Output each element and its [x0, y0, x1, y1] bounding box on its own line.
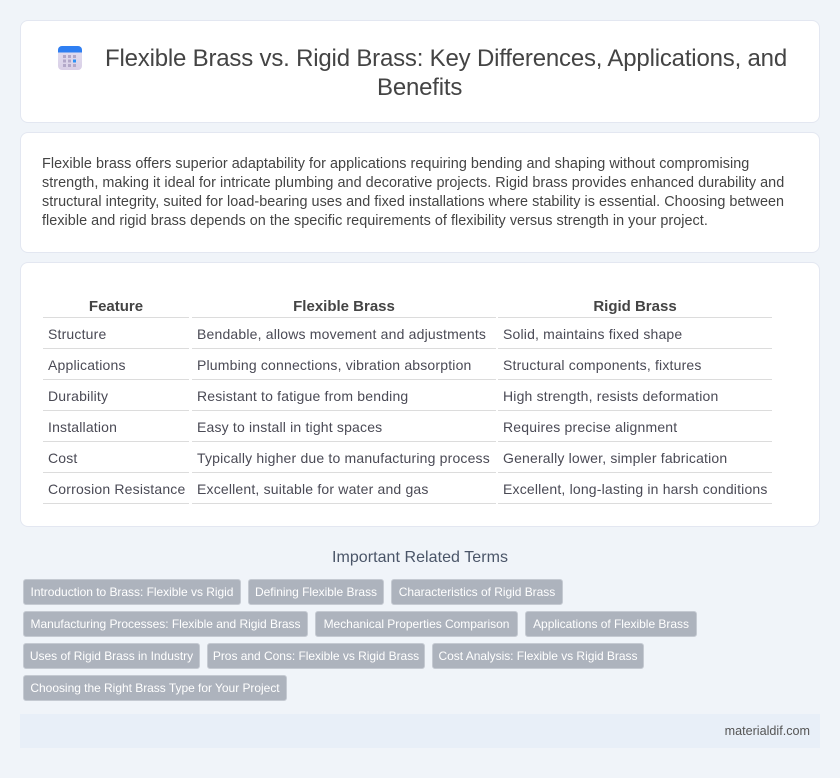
row: Structure flexible: Bendable, allows movement and adjustments: [197, 326, 486, 342]
tag: [315, 611, 518, 637]
footer bar: [20, 714, 820, 748]
row: Structure rigid: Solid, maintains fixed shape: [503, 326, 682, 342]
tag: [23, 643, 200, 669]
tag: [23, 611, 308, 637]
tag: Defining Flexible Brass: [255, 585, 377, 599]
row: Durability flexible: Resistant to fatigue from bending: [197, 388, 408, 404]
panel: intro paragraph: [20, 132, 820, 253]
table header: Rigid Brass: Rigid Brass: [593, 298, 677, 315]
row: Cost flexible: Typically higher due to manufacturing process: [197, 450, 490, 466]
panel: comparison table: [20, 262, 820, 527]
tag: Applications of Flexible Brass: [533, 617, 689, 631]
tag: [391, 579, 563, 605]
tag: Characteristics of Rigid Brass: [399, 585, 555, 599]
tag: Manufacturing Processes: Flexible and Rigid Brass: [30, 617, 300, 631]
row: Cost rigid: Generally lower, simpler fabrication: [503, 450, 727, 466]
row: Applications: Applications: [48, 357, 126, 373]
tag: Pros and Cons: Flexible vs Rigid Brass: [213, 649, 419, 663]
tag: [432, 643, 644, 669]
title line 1: Flexible Brass vs. Rigid Brass: Key Differences, Applications, and: [105, 45, 787, 72]
table header: Flexible Brass: Flexible Brass: [293, 298, 395, 315]
row: Installation rigid: Requires precise alignment: [503, 419, 677, 435]
row: Cost: Cost: [48, 450, 78, 466]
row: Durability: Durability: [48, 388, 108, 404]
tag: [23, 579, 241, 605]
row: Corrosion rigid: Excellent, long-lasting in harsh conditions: [503, 481, 768, 497]
row: Durability rigid: High strength, resists deformation: [503, 388, 718, 404]
tag: [525, 611, 697, 637]
paragraph line 4: flexible and rigid brass depends on the specific requirements of flexibility versus strength in your project.: [42, 213, 708, 229]
row: Installation: Installation: [48, 419, 117, 435]
tag: [23, 675, 287, 701]
tag: Uses of Rigid Brass in Industry: [30, 649, 193, 663]
tag: Introduction to Brass: Flexible vs Rigid: [31, 585, 233, 599]
footer text: materialdif.com: [725, 724, 810, 738]
tag group: related terms: [23, 579, 697, 701]
row: Applications flexible: Plumbing connections, vibration absorption: [197, 357, 472, 373]
title line 2: Benefits: [377, 74, 462, 101]
tag: Choosing the Right Brass Type for Your Project: [30, 681, 280, 695]
row: Applications rigid: Structural components, fixtures: [503, 357, 702, 373]
paragraph line 2: strength, making it ideal for intricate plumbing and decorative projects. Rigid brass provides enhanced durability and: [42, 175, 784, 191]
table header: Feature: Feature: [89, 298, 143, 315]
paragraph line 3: structural integrity, suited for load-bearing uses and fixed installations where stability is essential. Choosing between: [42, 194, 784, 210]
tag: Cost Analysis: Flexible vs Rigid Brass: [439, 649, 637, 663]
tag: Mechanical Properties Comparison: [324, 617, 509, 631]
heading: related terms: Important Related Terms: [332, 549, 508, 566]
paragraph line 1: Flexible brass offers superior adaptability for applications requiring bending and shaping without compromising: [42, 156, 749, 172]
icon: calendar: [58, 46, 82, 70]
panel: title card: [20, 20, 820, 123]
row: Installation flexible: Easy to install in tight spaces: [197, 419, 382, 435]
tag: [248, 579, 384, 605]
row: Corrosion Resistance: Corrosion Resistance: [48, 481, 185, 497]
row: Corrosion flexible: Excellent, suitable for water and gas: [197, 481, 429, 497]
tag: [207, 643, 425, 669]
row: Structure: Structure: [48, 326, 106, 342]
